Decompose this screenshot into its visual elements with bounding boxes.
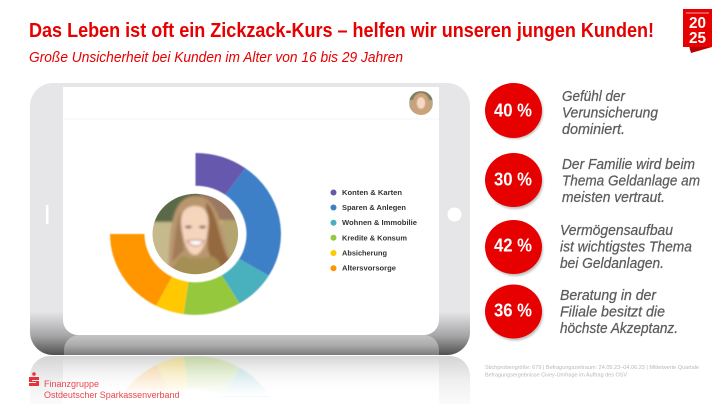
- stat text: 40 %: [562, 88, 659, 138]
- stat: 36 %: [485, 284, 543, 340]
- stat: 40 %: [485, 83, 543, 139]
- tablet bottom band: [64, 335, 439, 355]
- stat text: 36 %: Filiale besitzt die: [560, 304, 665, 320]
- organisation name: [44, 379, 180, 401]
- legend item: Altersvorsorge: Altersvorsorge: [342, 264, 396, 273]
- stat text: 30 %: meisten vertraut.: [562, 189, 665, 206]
- icon: 2025 calendar badge: [683, 9, 712, 53]
- source note: Stichprobengröße: 679 | Befragungszeitraum: 24.05.23–04.06.23 | Mittelwerte Quartale: [485, 365, 699, 371]
- tablet reflection: [30, 356, 470, 404]
- source note: Befragungsergebnisse Civey-Umfrage im Auftrag des OSV: [485, 372, 627, 378]
- icon: 2025 calendar badge: 20: [689, 15, 706, 32]
- stat text: 40 %: Gefühl der: [562, 88, 626, 105]
- legend item: Konten & Karten: Konten & Karten: [342, 188, 402, 197]
- stat text: 42 %: bei Geldanlagen.: [560, 255, 664, 272]
- stat: 42 %: 42 %: [494, 236, 532, 256]
- photo: young woman: [152, 194, 238, 274]
- organisation name: Ostdeutscher Sparkassenverband: [44, 390, 180, 401]
- source note: [485, 365, 699, 378]
- legend item: Sparen & Anlegen: Sparen & Anlegen: [342, 203, 406, 212]
- legend item: Wohnen & Immobilie: Wohnen & Immobilie: [342, 218, 417, 227]
- stat: 40 %: 40 %: [494, 100, 532, 120]
- stat: 36 %: 36 %: [494, 300, 532, 320]
- side button: [46, 205, 48, 224]
- stat text: 40 %: Verunsicherung: [562, 104, 659, 122]
- donut chart: [110, 153, 281, 315]
- organisation name: Finanzgruppe: [44, 379, 99, 390]
- subtitle: Große Unsicherheit bei Kunden im Alter von 16 bis 29 Jahren: [29, 49, 403, 66]
- stat: 30 %: 30 %: [494, 170, 532, 190]
- small avatar: [409, 91, 433, 116]
- stat: 42 %: [485, 220, 543, 276]
- home button: [448, 208, 462, 222]
- legend item: Kredite & Konsum: Kredite & Konsum: [342, 233, 407, 242]
- icon: Sparkasse logo: [29, 372, 39, 386]
- segment: Absicherung: [156, 277, 188, 314]
- title: Das Leben ist oft ein Zickzack-Kurs – helfen wir unseren jungen Kunden!: [29, 20, 654, 42]
- icon: 2025 calendar badge: 25: [689, 30, 706, 47]
- segment: Wohnen & Immobilie: [222, 259, 269, 303]
- stat text: 42 %: [560, 222, 692, 272]
- tablet frame: [30, 83, 470, 355]
- legend: [330, 188, 417, 273]
- stat text: 30 %: Thema Geldanlage am: [562, 172, 700, 190]
- segment: Kredite & Konsum: [184, 275, 240, 315]
- stat text: 36 %: höchste Akzeptanz.: [560, 320, 678, 337]
- legend item: Absicherung: Absicherung: [342, 248, 387, 258]
- stat: 30 %: [485, 153, 543, 209]
- tablet screen: [63, 87, 439, 335]
- stat text: 30 %: [562, 156, 700, 206]
- segment: Sparen & Anlegen: [225, 168, 281, 276]
- stat text: 36 %: Beratung in der: [560, 287, 657, 304]
- stat text: 40 %: dominiert.: [562, 121, 625, 138]
- segment: Konten & Karten: [196, 153, 245, 195]
- stat text: 36 %: [560, 287, 678, 337]
- stat text: 30 %: Der Familie wird beim: [562, 156, 695, 173]
- segment: Altersvorsorge: [110, 234, 172, 306]
- stat text: 42 %: ist wichtigstes Thema: [560, 238, 692, 256]
- stat text: 42 %: Vermögensaufbau: [560, 222, 674, 239]
